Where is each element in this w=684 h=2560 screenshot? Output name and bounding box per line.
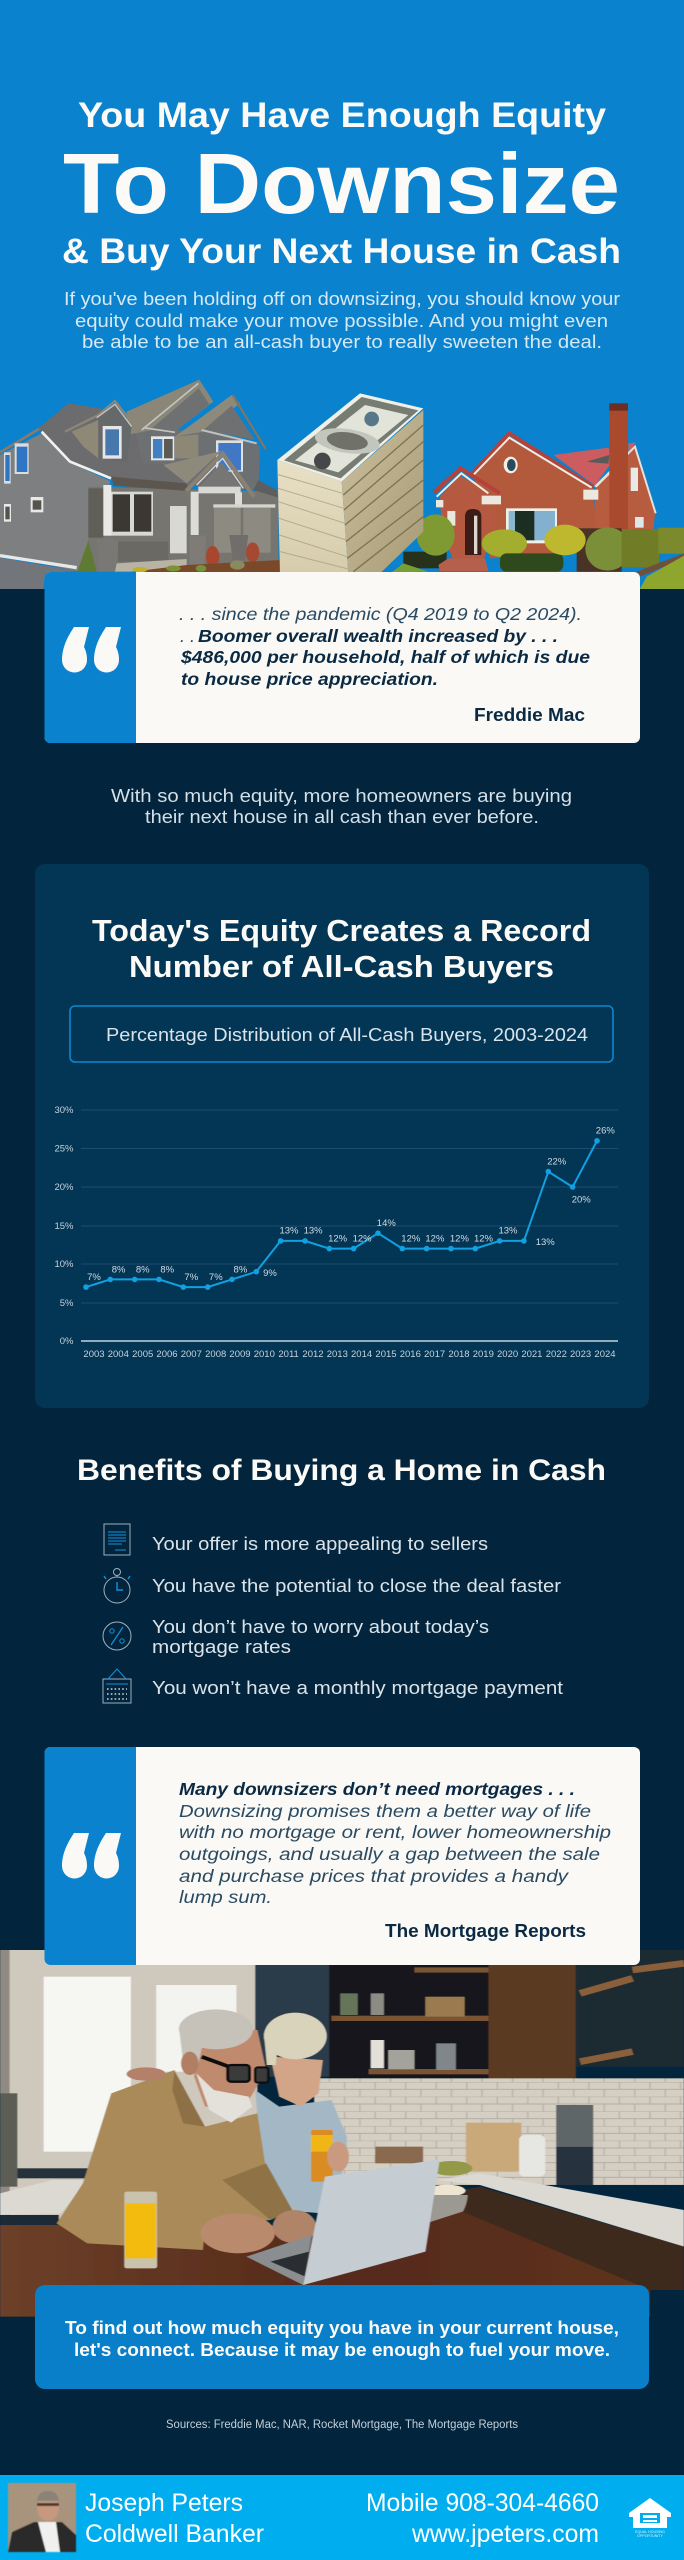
title: You May Have Enough Equity (78, 96, 607, 135)
quote text: to house price appreciation. (181, 669, 438, 689)
x axis labels: 2018 (448, 1349, 470, 1360)
agent contact (366, 2489, 599, 2548)
quote text: . . . since the pandemic (Q4 2019 to Q2 2024). (179, 604, 582, 624)
quote text: with no mortgage or rent, lower homeownership (179, 1822, 611, 1842)
kitchen photo (0, 1950, 684, 2317)
money stack (277, 393, 423, 573)
icon: equal housing opportunity: EQUAL HOUSING (635, 2530, 665, 2534)
icon: equal housing opportunity: OPPORTUNITY (637, 2534, 664, 2538)
x axis labels: 2008 (205, 1349, 226, 1360)
x axis labels: 2020 (497, 1349, 518, 1360)
x axis labels: 2009 (229, 1349, 251, 1360)
agent contact: www.jpeters.com (411, 2520, 599, 2548)
x axis labels: 2022 (546, 1349, 567, 1360)
benefit 3 (152, 1616, 489, 1657)
benefit 2: You have the potential to close the deal faster (152, 1575, 561, 1596)
icon: calendar (103, 1669, 131, 1703)
quote text (179, 1779, 611, 1907)
icon: stopwatch (104, 1568, 130, 1603)
x axis labels: 2015 (375, 1349, 397, 1360)
y axis labels (54, 1105, 74, 1347)
chart subtitle box (70, 1006, 613, 1062)
transition text: their next house in all cash than ever before. (145, 806, 539, 827)
x axis labels: 2005 (132, 1349, 153, 1360)
chart heading (92, 913, 591, 984)
x axis labels: 2004 (108, 1349, 129, 1360)
transition text: With so much equity, more homeowners are buying (111, 785, 572, 806)
sources: Sources: Freddie Mac, NAR, Rocket Mortgage, The Mortgage Reports (166, 2419, 518, 2431)
icon: equal housing opportunity (629, 2498, 671, 2538)
quote text: lump sum. (179, 1887, 272, 1907)
quote text: $486,000 per household, half of which is due (180, 647, 590, 667)
panel: chart (35, 864, 649, 1408)
benefits heading: Benefits of Buying a Home in Cash (77, 1454, 606, 1487)
call to action: let's connect. Because it may be enough to fuel your move. (74, 2340, 610, 2360)
icon: document (104, 1524, 130, 1555)
x axis labels (83, 1349, 616, 1360)
y axis labels: 15% (54, 1221, 74, 1232)
call to action (35, 2285, 649, 2389)
x axis labels: 2023 (570, 1349, 591, 1360)
intro paragraph: equity could make your move possible. And you might even (75, 310, 608, 331)
data labels: 12% (450, 1234, 469, 1245)
y axis labels: 5% (60, 1298, 74, 1309)
y axis labels: 0% (60, 1336, 74, 1347)
data labels: 20% (572, 1195, 591, 1206)
quote text (179, 604, 590, 689)
data labels: 9% (263, 1268, 277, 1279)
data points (83, 1138, 600, 1290)
title: To Downsize (63, 137, 620, 232)
icon: quotation marks (62, 1833, 121, 1878)
quote text: Boomer overall wealth increased by . . . (198, 626, 558, 646)
intro paragraph: be able to be an all-cash buyer to really sweeten the deal. (82, 331, 602, 352)
quote source: The Mortgage Reports (385, 1921, 586, 1941)
agent name (85, 2489, 264, 2548)
data labels (87, 1125, 615, 1283)
transition text (111, 785, 572, 827)
data labels: 12% (353, 1234, 372, 1245)
benefit 4: You won’t have a monthly mortgage payment (152, 1677, 563, 1698)
y axis labels: 10% (54, 1259, 74, 1270)
data labels: 13% (304, 1226, 323, 1237)
quote card: Freddie Mac (44, 572, 640, 743)
data labels: 8% (136, 1264, 150, 1275)
x axis labels: 2011 (278, 1349, 299, 1360)
icon: percent (103, 1622, 131, 1650)
data labels: 12% (425, 1234, 445, 1245)
x axis labels: 2012 (302, 1349, 324, 1360)
benefit 3: mortgage rates (152, 1636, 291, 1657)
x axis labels: 2010 (254, 1349, 275, 1360)
agent name: Coldwell Banker (85, 2520, 264, 2548)
data line (86, 1141, 597, 1287)
data labels: 12% (474, 1234, 494, 1245)
data labels: 8% (234, 1264, 248, 1275)
data labels: 13% (498, 1226, 518, 1237)
benefit 3: You don’t have to worry about today’s (152, 1616, 489, 1637)
data labels: 13% (536, 1237, 555, 1248)
x axis labels: 2017 (424, 1349, 445, 1360)
data labels: 7% (184, 1272, 199, 1283)
footer band (0, 2475, 684, 2560)
chart heading: Number of All-Cash Buyers (129, 949, 554, 984)
brick house (392, 403, 684, 590)
quote text: and purchase prices that provides a handy (179, 1866, 569, 1886)
x axis labels: 2021 (521, 1349, 542, 1360)
chart subtitle box: Percentage Distribution of All-Cash Buyers, 2003-2024 (106, 1025, 588, 1045)
quote text: Downsizing promises them a better way of life (179, 1801, 591, 1821)
quote text: . . (180, 626, 195, 646)
quote text: outgoings, and usually a gap between the sale (179, 1844, 600, 1864)
y axis labels: 30% (54, 1105, 74, 1116)
data labels: 12% (401, 1234, 421, 1245)
x axis labels: 2016 (400, 1349, 421, 1360)
grey house (0, 380, 280, 590)
data labels: 12% (328, 1234, 348, 1245)
agent contact: Mobile 908-304-4660 (366, 2489, 599, 2517)
call to action: To find out how much equity you have in your current house, (65, 2318, 619, 2338)
x axis labels: 2007 (181, 1349, 202, 1360)
agent portrait (8, 2483, 76, 2552)
data labels: 8% (112, 1264, 126, 1275)
title: & Buy Your Next House in Cash (62, 232, 621, 271)
data labels: 7% (87, 1272, 101, 1283)
quote card: The Mortgage Reports (44, 1747, 640, 1965)
title (62, 96, 621, 271)
data labels: 8% (160, 1264, 175, 1275)
y axis labels: 25% (54, 1144, 74, 1154)
data labels: 22% (547, 1156, 567, 1167)
x axis labels: 2013 (327, 1349, 348, 1360)
line chart (54, 1105, 618, 1360)
benefits section (77, 1454, 606, 1703)
intro paragraph (64, 288, 620, 352)
hero panel (0, 0, 684, 589)
quote source: Freddie Mac (474, 705, 585, 725)
benefit 1: Your offer is more appealing to sellers (152, 1533, 488, 1554)
chart heading: Today's Equity Creates a Record (92, 913, 591, 948)
icon: quotation marks (62, 627, 121, 672)
x axis labels: 2006 (156, 1349, 178, 1360)
hero photo collage (0, 380, 684, 590)
x axis labels: 2003 (83, 1349, 105, 1360)
x axis labels: 2019 (473, 1349, 494, 1360)
data labels: 7% (209, 1272, 223, 1283)
x axis labels: 2014 (351, 1349, 372, 1360)
y axis labels: 20% (54, 1182, 74, 1193)
data labels: 14% (377, 1218, 396, 1229)
agent name: Joseph Peters (85, 2489, 243, 2517)
x axis labels: 2024 (594, 1349, 616, 1360)
data labels: 26% (596, 1125, 615, 1136)
quote text: Many downsizers don’t need mortgages . . . (179, 1779, 575, 1799)
data labels: 13% (279, 1226, 299, 1237)
intro paragraph: If you've been holding off on downsizing, you should know your (64, 288, 620, 309)
